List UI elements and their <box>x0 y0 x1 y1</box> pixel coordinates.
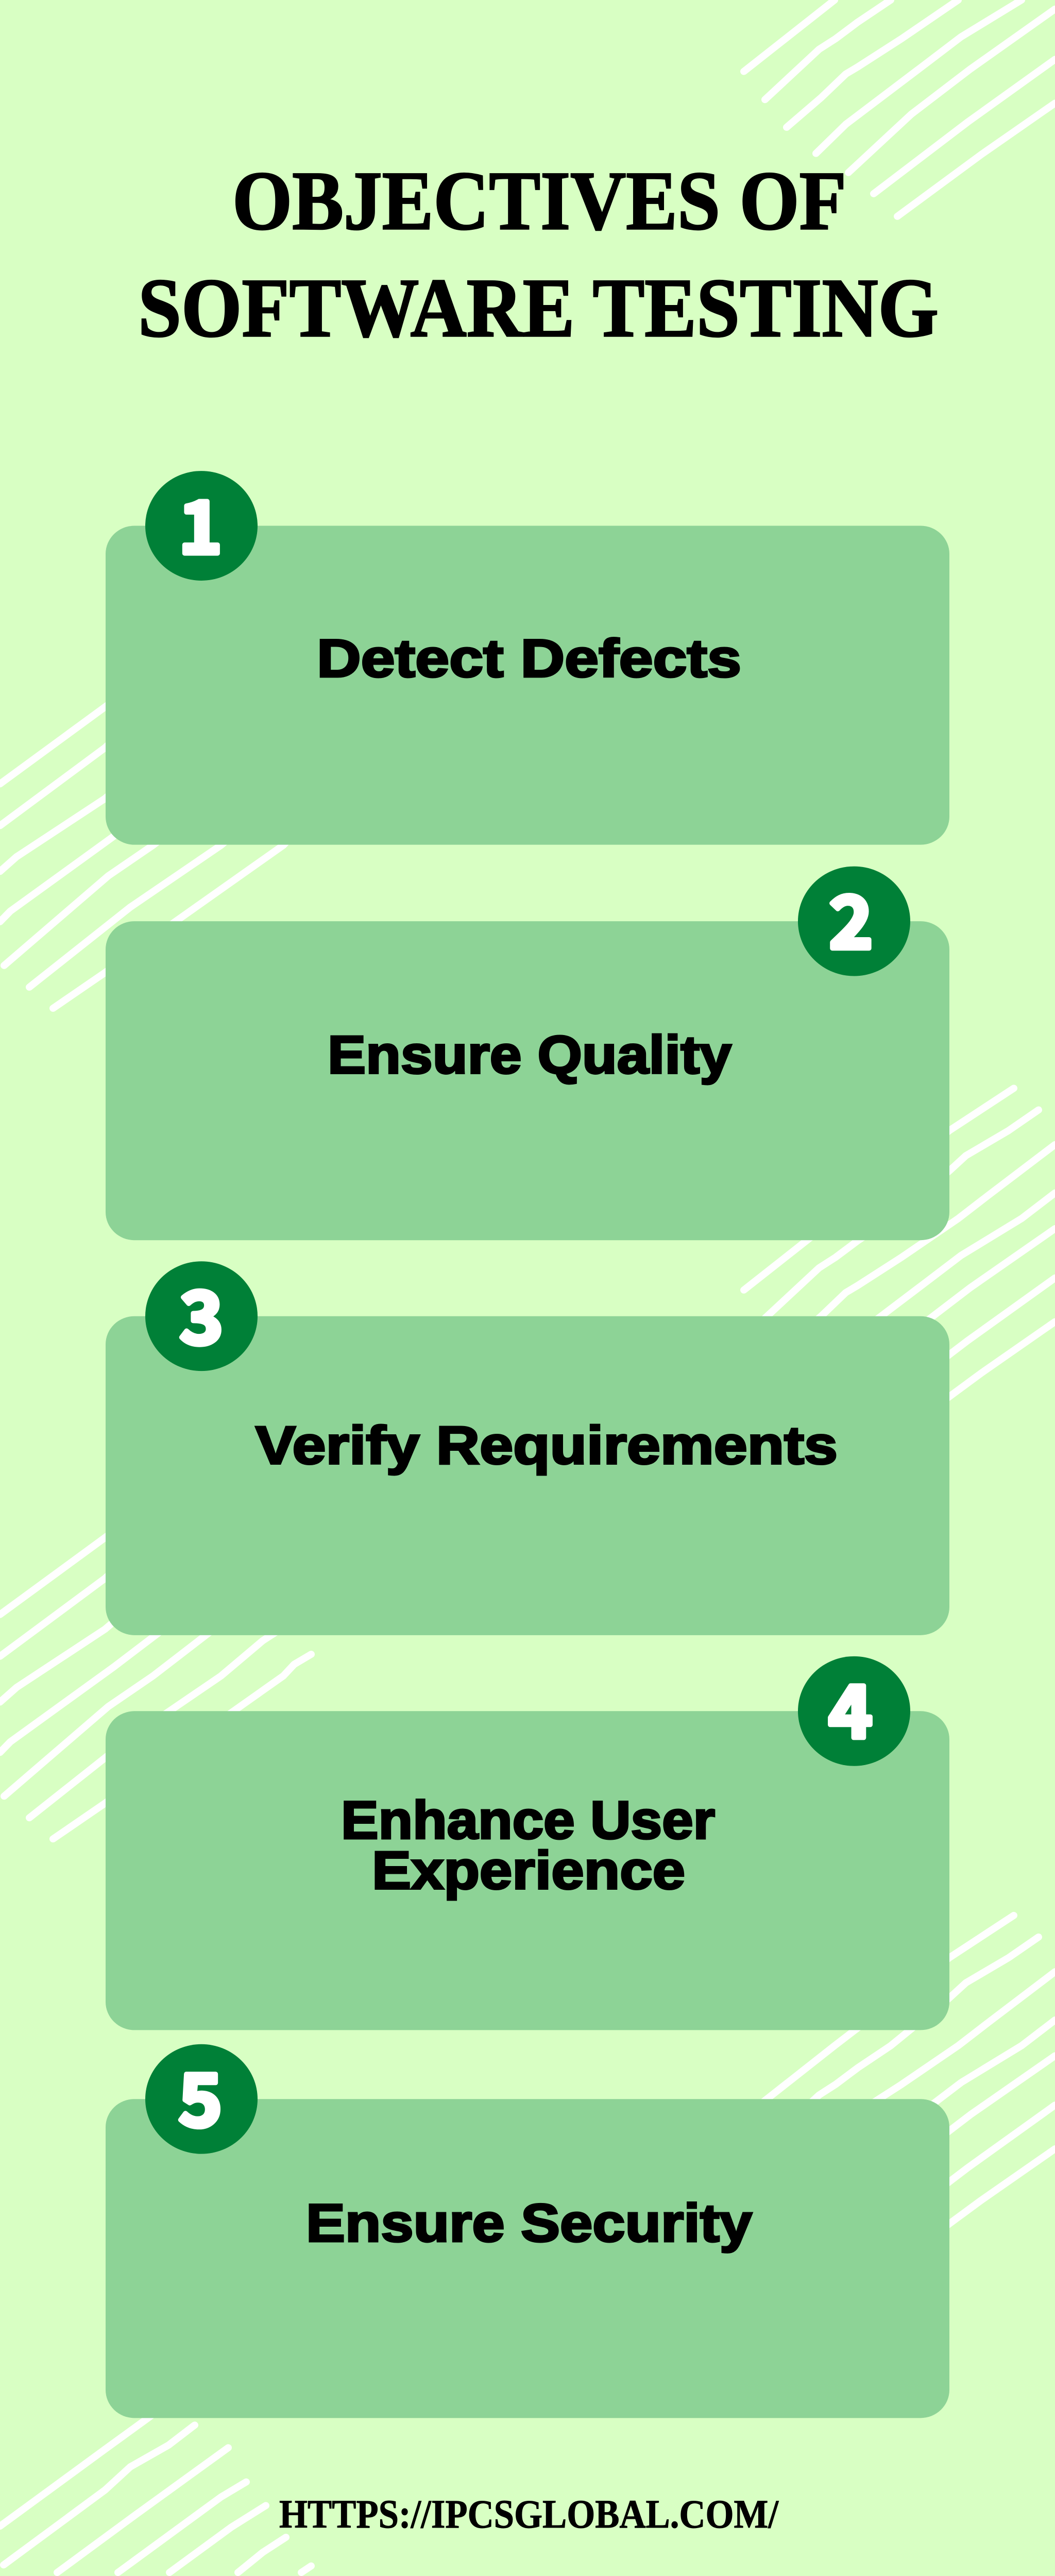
item text: Detect Defects <box>317 629 741 688</box>
number badge 4 <box>798 1654 910 1766</box>
number badge 2 <box>798 865 910 976</box>
item text: Enhance User <box>341 1790 715 1850</box>
item text: Ensure Security <box>306 2194 752 2253</box>
title: OBJECTIVES OF <box>232 154 846 247</box>
card background <box>106 526 949 845</box>
card background <box>106 1711 949 2030</box>
item text: Ensure Quality <box>328 1025 731 1085</box>
item text: Verify Requirements <box>256 1416 838 1476</box>
number badge 1 <box>145 469 258 581</box>
item text <box>341 1790 715 1901</box>
number badge 2: 2 <box>829 865 873 969</box>
title: SOFTWARE TESTING <box>138 261 939 354</box>
number badge 3: 3 <box>180 1260 223 1365</box>
footer url: HTTPS://IPCSGLOBAL.COM/ <box>279 2493 779 2537</box>
number badge 1: 1 <box>179 469 222 574</box>
panel: detect defects <box>106 469 949 845</box>
card background <box>106 1316 949 1635</box>
number badge 5 <box>145 2042 258 2154</box>
item text: Experience <box>372 1841 685 1901</box>
card background <box>106 921 949 1240</box>
card background <box>106 2099 949 2418</box>
title <box>138 154 939 354</box>
panel: ensure quality <box>106 865 949 1240</box>
panel: ensure security <box>106 2042 949 2418</box>
number badge 4: 4 <box>829 1654 872 1759</box>
panel: verify requirements <box>106 1260 949 1635</box>
number badge 5: 5 <box>179 2042 222 2147</box>
number badge 3 <box>145 1260 258 1371</box>
panel: enhance user experience <box>106 1654 949 2030</box>
